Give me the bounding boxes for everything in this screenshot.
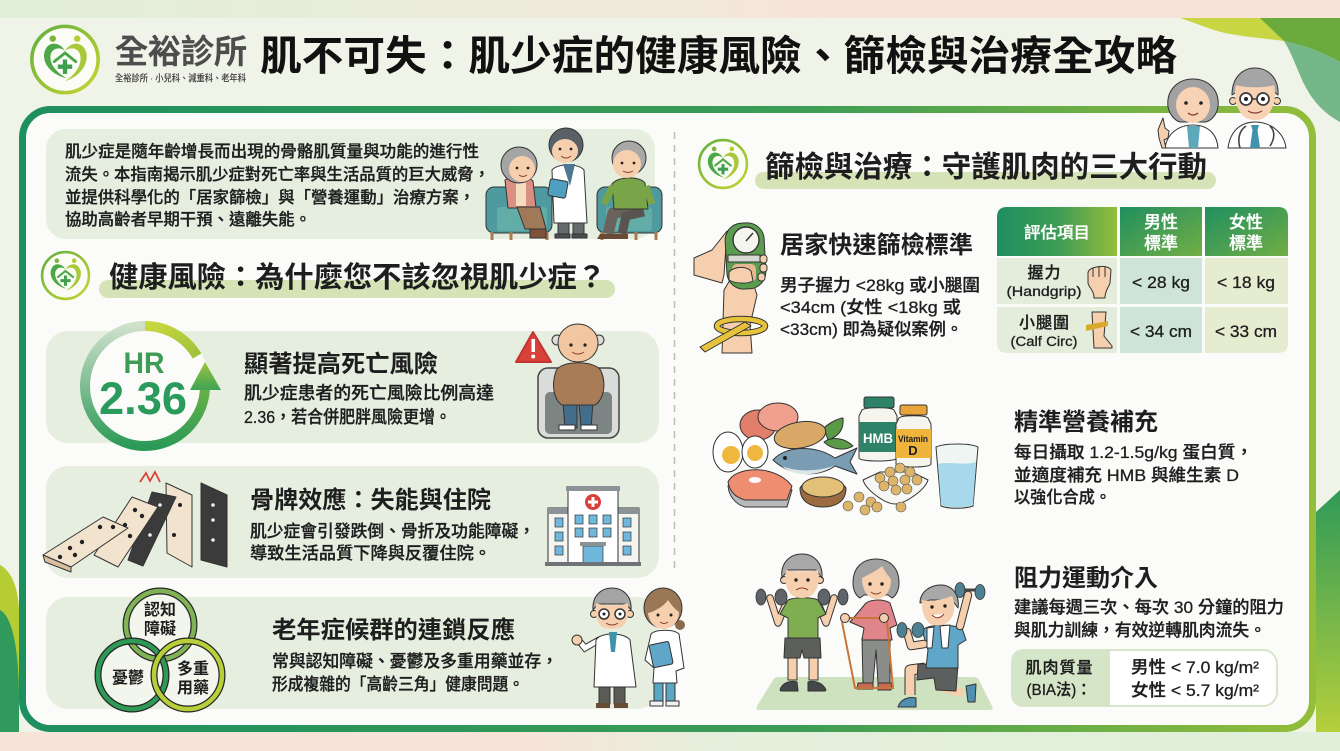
panel: intro xyxy=(46,128,662,240)
chart: three linked circles xyxy=(98,591,222,709)
heading: screening and treatment xyxy=(699,140,1216,189)
heading: health risk xyxy=(42,252,615,299)
icon: protein foods, supplements and water: Vitamin xyxy=(898,434,928,444)
card heading: 顯著提高死亡風險 xyxy=(244,350,438,378)
table header xyxy=(997,207,1288,256)
icon: man on scale xyxy=(538,324,619,438)
table header: 標準 xyxy=(1144,234,1178,253)
table row: handgrip: < 28 kg xyxy=(1132,273,1190,292)
chart: HR ring: HR xyxy=(124,347,165,380)
chart: three linked circles: 憂鬱 xyxy=(112,668,144,687)
figure: man with dumbbells xyxy=(756,554,848,691)
figure: female nurse doctor xyxy=(644,588,685,706)
table row: handgrip xyxy=(997,258,1288,304)
clinic logo xyxy=(32,26,98,93)
decorative corner: bottom right xyxy=(1316,490,1340,732)
table row: calf circumference: < 33 cm xyxy=(1215,322,1277,341)
block: resistance exercise text xyxy=(1014,565,1284,640)
block: nutrition text: 以強化合成。 xyxy=(1014,488,1111,507)
callout: BIA muscle mass: 女性 < 5.7 kg/m² xyxy=(1131,680,1259,700)
chart: three linked circles: 障礙 xyxy=(144,619,176,638)
intro text: 並提供科學化的「居家篩檢」與「營養運動」治療方案， xyxy=(65,187,475,207)
table header: 標準 xyxy=(1229,234,1263,253)
card text xyxy=(244,383,495,427)
figure: male doctor xyxy=(572,588,636,708)
title: 肌不可失：肌少症的健康風險、篩檢與治療全攻略 xyxy=(260,33,1177,79)
panel: geriatric syndromes xyxy=(46,588,685,709)
block: resistance exercise text: 與肌力訓練，有效逆轉肌肉流失。 xyxy=(1014,621,1266,640)
figure: woman with resistance band xyxy=(840,559,899,690)
callout: BIA muscle mass: 男性 < 7.0 kg/m² xyxy=(1131,658,1259,677)
standing doctor xyxy=(548,128,587,238)
chart: three linked circles: 用藥 xyxy=(177,679,209,697)
table row: handgrip: < 18 kg xyxy=(1217,273,1275,292)
table header: 評估項目 xyxy=(1024,224,1090,242)
block: nutrition text xyxy=(1014,409,1253,507)
divider xyxy=(674,132,676,572)
icon: hand with grip dynamometer and tape xyxy=(694,222,767,353)
icon: protein foods, supplements and water: HMB xyxy=(863,430,893,446)
decorative corner: bottom left xyxy=(0,565,19,732)
icon: warning triangle xyxy=(516,332,551,362)
heading: screening and treatment: 篩檢與治療：守護肌肉的三大行動 xyxy=(765,151,1207,184)
table header: 女性 xyxy=(1229,212,1263,232)
icon: two doctors at top right xyxy=(1158,68,1286,148)
chart: HR ring: 2.36 xyxy=(99,373,187,424)
table row: handgrip: (Handgrip) xyxy=(1006,284,1082,299)
icon: dominoes xyxy=(43,472,227,572)
callout: BIA muscle mass: (BIA法)： xyxy=(1026,681,1092,699)
table row: calf circumference xyxy=(997,307,1288,353)
clinic name: 全裕診所 · 小兒科、減重科、老年科 xyxy=(115,72,246,84)
card text: 肌少症會引發跌倒、骨折及功能障礙， xyxy=(250,522,535,541)
right armchair with grandfather xyxy=(597,141,662,240)
chart: HR ring xyxy=(80,321,221,451)
table header: 男性 xyxy=(1144,213,1178,232)
card text: 形成複雜的「高齡三角」健康問題。 xyxy=(272,674,524,694)
figure: man lunging with dumbbells xyxy=(897,582,985,707)
decorative corner: top right xyxy=(1180,18,1340,122)
icon: hospital xyxy=(545,486,641,566)
clinic name: 全裕診所 xyxy=(115,33,247,70)
card text: 2.36，若合併肥胖風險更增。 xyxy=(244,407,451,427)
card text xyxy=(250,522,535,563)
panel: mortality risk xyxy=(46,321,659,451)
intro text: 協助高齡者早期干預、遠離失能。 xyxy=(65,210,311,229)
block: home screening text: <34cm (女性 <18kg 或 xyxy=(780,297,961,317)
panel: domino effect xyxy=(43,466,659,578)
block: home screening text xyxy=(780,231,980,339)
chart: three linked circles: 認知 xyxy=(144,600,176,619)
block: home screening text: 居家快速篩檢標準 xyxy=(780,231,973,259)
block: home screening text: <33cm) 即為疑似案例。 xyxy=(780,320,963,339)
card heading: 骨牌效應：失能與住院 xyxy=(250,486,491,514)
callout: BIA muscle mass: 肌肉質量 xyxy=(1026,659,1092,677)
block: nutrition text: 精準營養補充 xyxy=(1014,409,1158,436)
intro text xyxy=(65,141,490,229)
block: home screening text: 男子握力 <28kg 或小腿圍 xyxy=(780,276,980,295)
main panel xyxy=(22,110,1312,728)
table row: calf circumference: 小腿圍 xyxy=(1019,314,1069,332)
block: nutrition text: 每日攝取 1.2-1.5g/kg 蛋白質， xyxy=(1014,443,1253,462)
card text: 常與認知障礙、憂鬱及多重用藥並存， xyxy=(272,652,558,671)
card text xyxy=(272,652,558,694)
icon: consultation scene xyxy=(486,128,662,240)
intro text: 肌少症是隨年齡增長而出現的骨骼肌質量與功能的進行性 xyxy=(65,141,479,161)
chart: three linked circles: 多重 xyxy=(177,660,209,678)
icon: protein foods, supplements and water xyxy=(713,397,978,515)
table row: calf circumference: (Calf Circ) xyxy=(1010,334,1078,349)
callout: BIA muscle mass xyxy=(1011,649,1277,707)
block: resistance exercise text: 建議每週三次、每次 30 分鐘的阻力 xyxy=(1014,598,1284,617)
heading: health risk: 健康風險：為什麼您不該忽視肌少症？ xyxy=(109,261,606,294)
icon: protein foods, supplements and water: D xyxy=(908,443,918,458)
table row: handgrip: 握力 xyxy=(1028,264,1060,282)
block: resistance exercise text: 阻力運動介入 xyxy=(1014,565,1158,592)
table row: calf circumference: < 34 cm xyxy=(1130,322,1192,341)
block: nutrition text: 並適度補充 HMB 與維生素 D xyxy=(1014,466,1239,485)
icon: seniors exercising xyxy=(756,554,993,710)
intro text: 流失。本指南揭示肌少症對死亡率與生活品質的巨大威脅， xyxy=(65,165,490,184)
card text: 肌少症患者的死亡風險比例高達 xyxy=(244,383,495,403)
card heading: 老年症候群的連鎖反應 xyxy=(272,616,515,644)
left armchair with grandmother xyxy=(486,147,552,240)
table: screening standards xyxy=(997,207,1288,353)
card text: 導致生活品質下降與反覆住院。 xyxy=(250,544,491,563)
icon: doctor and nurse xyxy=(572,588,685,708)
